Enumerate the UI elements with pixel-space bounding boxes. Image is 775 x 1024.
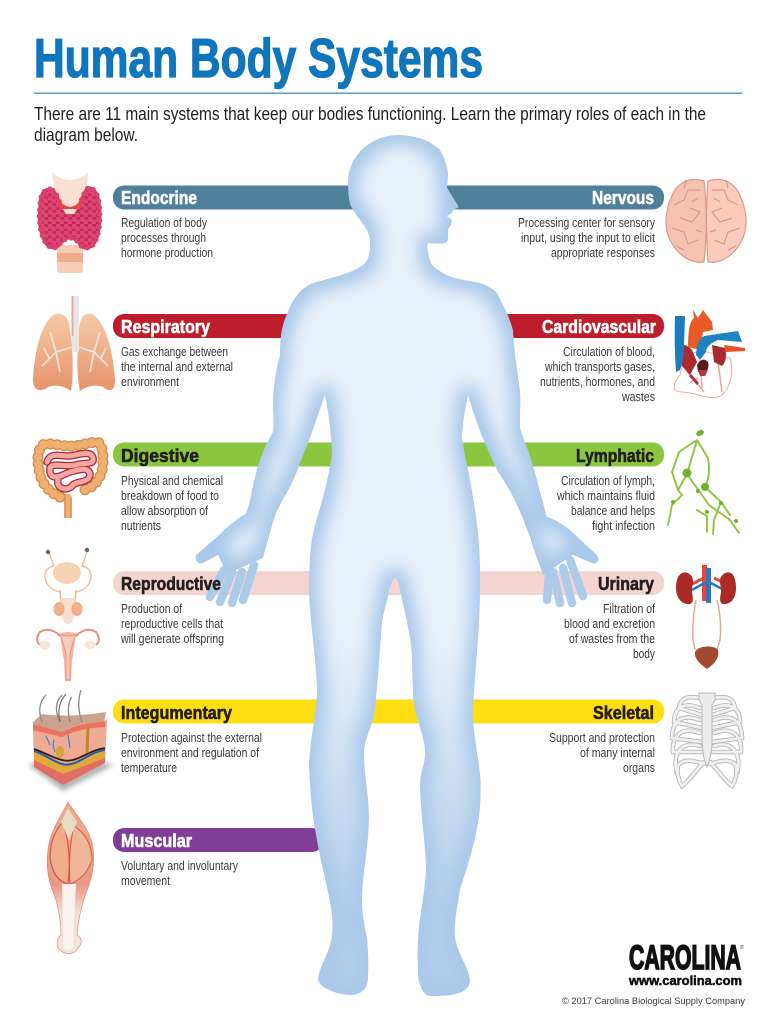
title rule	[34, 92, 742, 94]
panel: muscular: Muscular	[121, 830, 192, 851]
panel: respiratory: Respiratory	[121, 316, 211, 337]
bar: endocrine and nervous	[113, 186, 664, 210]
panel: reproductive: Reproductive	[121, 573, 221, 594]
panel: skeletal: Skeletal	[593, 702, 654, 723]
bar: respiratory and cardiovascular	[113, 314, 664, 338]
panel: cardiovascular: Cardiovascular	[542, 316, 656, 337]
panel: respiratory: the internal and external	[121, 359, 233, 374]
panel: endocrine: Regulation of body	[121, 215, 207, 230]
panel: lymphatic: which maintains fluid	[556, 488, 655, 503]
icon: intestines	[38, 442, 103, 518]
panel: endocrine: Endocrine	[121, 187, 197, 208]
panel: endocrine: processes through	[121, 230, 206, 245]
bar: digestive and lymphatic	[113, 442, 664, 466]
logo: Carolina	[628, 939, 744, 988]
panel: digestive	[121, 445, 223, 533]
panel: nervous: Nervous	[592, 187, 654, 208]
human body silhouette	[195, 135, 598, 996]
copyright: © 2017 Carolina Biological Supply Company	[562, 996, 745, 1007]
panel: reproductive: Production of	[121, 601, 182, 616]
panel: cardiovascular: Circulation of blood,	[563, 344, 655, 359]
panel: endocrine	[121, 187, 213, 260]
panel: nervous: input, using the input to elicit	[521, 230, 655, 245]
panel: lymphatic: balance and helps	[571, 503, 655, 518]
panel: skeletal: Support and protection	[549, 730, 655, 745]
panel: integumentary: Integumentary	[121, 702, 233, 723]
bar: reproductive and urinary	[113, 571, 664, 595]
panel: nervous: appropriate responses	[551, 245, 655, 260]
bar: integumentary and skeletal	[113, 700, 664, 724]
panel: lymphatic	[556, 445, 655, 533]
icon: rib cage	[672, 693, 742, 786]
panel: digestive: allow absorption of	[121, 503, 208, 518]
icon: reproductive organs	[37, 548, 99, 681]
panel: integumentary	[121, 702, 262, 775]
icon: thyroid	[39, 172, 100, 273]
panel: urinary: of wastes from the	[569, 631, 655, 646]
panel: endocrine: hormone production	[121, 245, 213, 260]
panel: lymphatic: fight infection	[592, 518, 655, 533]
title: Human Body Systems	[34, 27, 483, 89]
icon: heart	[674, 310, 745, 398]
panel: urinary: Filtration of	[603, 601, 655, 616]
panel: urinary: body	[633, 646, 655, 661]
panel: cardiovascular: nutrients, hormones, and	[540, 374, 655, 389]
panel: nervous	[518, 187, 655, 260]
panel: respiratory: Gas exchange between	[121, 344, 228, 359]
panel: integumentary: environment and regulation of	[121, 745, 259, 760]
panel: skeletal	[549, 702, 655, 775]
logo: Carolina: ®	[740, 944, 744, 951]
icon: muscle	[47, 802, 94, 954]
panel: muscular	[121, 830, 238, 888]
icon: kidneys and bladder	[676, 565, 736, 669]
panel: nervous: Processing center for sensory	[518, 215, 655, 230]
panel: digestive: Digestive	[121, 445, 199, 466]
panel: muscular: movement	[121, 873, 170, 888]
panel: muscular: Voluntary and involuntary	[121, 858, 238, 873]
panel: urinary: Urinary	[598, 573, 655, 594]
panel: lymphatic: Lymphatic	[576, 445, 654, 466]
panel: lymphatic: Circulation of lymph,	[561, 473, 655, 488]
panel: skeletal: of many internal	[580, 745, 655, 760]
panel: cardiovascular: which transports gases,	[544, 359, 655, 374]
panel: cardiovascular: wastes	[621, 389, 655, 404]
panel: integumentary: temperature	[121, 760, 177, 775]
panel: cardiovascular	[540, 316, 656, 404]
icon: brain	[666, 180, 746, 262]
panel: integumentary: Protection against the external	[121, 730, 262, 745]
icon: skin cross-section	[28, 690, 114, 791]
intro text	[34, 104, 706, 145]
bar: muscular	[113, 828, 323, 852]
panel: reproductive: reproductive cells that	[121, 616, 223, 631]
icon: lungs	[33, 296, 115, 391]
panel: urinary	[564, 573, 655, 661]
panel: respiratory: environment	[121, 374, 179, 389]
panel: respiratory	[121, 316, 233, 389]
intro text: diagram below.	[34, 125, 138, 145]
icon: lymph vessels	[668, 429, 739, 534]
panel: digestive: breakdown of food to	[121, 488, 219, 503]
panel: digestive: nutrients	[121, 518, 161, 533]
panel: digestive: Physical and chemical	[121, 473, 223, 488]
panel: reproductive	[120, 573, 224, 646]
panel: urinary: blood and excretion	[564, 616, 655, 631]
panel: reproductive: will generate offspring	[120, 631, 224, 646]
logo: Carolina: www.carolina.com	[628, 974, 742, 988]
panel: skeletal: organs	[623, 760, 655, 775]
